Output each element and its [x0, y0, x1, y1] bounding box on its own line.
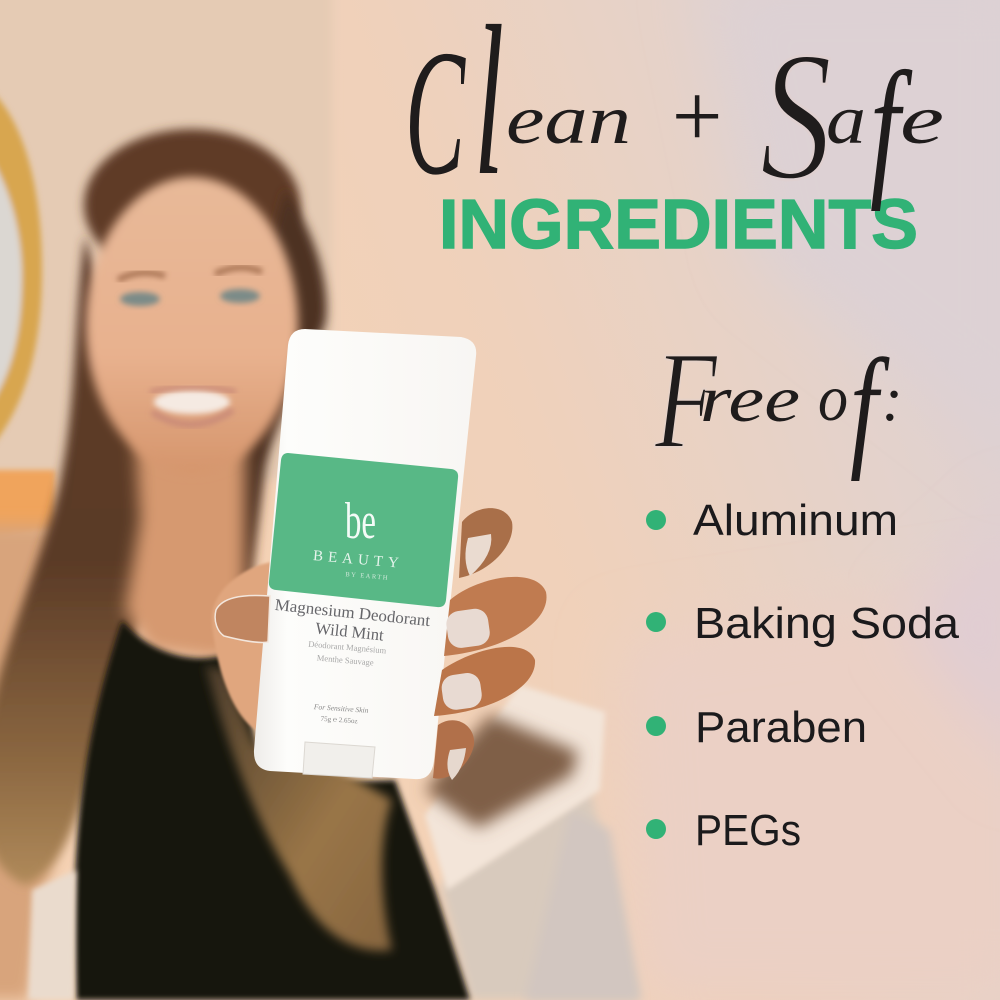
title script: Clean + Safe: f — [870, 40, 912, 212]
item: Aluminum: Aluminum — [693, 496, 898, 545]
fingers — [215, 508, 547, 780]
brand mark: be — [345, 493, 376, 550]
subheading script: Free of: F — [654, 323, 718, 478]
product name: 75g ℮ 2.65oz — [320, 715, 358, 725]
subheading script: Free of: : — [882, 366, 903, 434]
subheading script: Free of: o — [818, 362, 848, 435]
subheading script: Free of: ree — [700, 363, 800, 436]
hair top — [84, 129, 300, 281]
heading: INGREDIENTS: INGREDIENTS — [439, 185, 918, 263]
title script: Clean + Safe: S — [760, 14, 832, 219]
folded towel — [425, 715, 578, 828]
neck and chest — [125, 430, 245, 660]
black top — [74, 620, 470, 1000]
product name: Wild Mint — [314, 618, 385, 645]
hair, behind neck right — [205, 190, 327, 600]
middle finger — [444, 577, 547, 656]
eyebrows — [118, 273, 165, 280]
title script: Clean + Safe: ean — [506, 82, 631, 159]
product name — [274, 595, 432, 725]
smile — [154, 390, 230, 414]
hair, left side — [0, 235, 165, 885]
eyes — [120, 292, 160, 306]
title script: Clean + Safe: C — [405, 13, 466, 212]
product name: For Sensitive Skin — [313, 702, 369, 715]
bare arm and skin, left — [0, 525, 70, 1000]
brand name: BEAUTY — [312, 548, 404, 572]
deodorant stick — [254, 329, 476, 779]
item: Baking Soda: Baking Soda — [694, 599, 960, 648]
base notch — [303, 742, 375, 778]
cabinet side shadow — [525, 810, 640, 1000]
list: free-of ingredients — [646, 496, 960, 855]
item: PEGs — [646, 806, 801, 855]
item: Paraben: Paraben — [695, 703, 867, 752]
face — [86, 177, 298, 473]
title script: Clean + Safe: e — [900, 82, 944, 159]
blurred cabinet — [425, 685, 640, 1000]
little finger — [433, 720, 474, 779]
item: PEGs: PEGs — [695, 806, 801, 855]
green label — [269, 453, 458, 607]
hair, right lower — [205, 665, 392, 951]
title script: Clean + Safe: + — [666, 67, 727, 166]
product name: Menthe Sauvage — [316, 653, 374, 667]
thumb nail — [215, 596, 270, 643]
title script: Clean + Safe: a — [826, 82, 866, 159]
blurred mirror frame — [0, 75, 42, 470]
back of hand — [212, 562, 272, 733]
ring finger — [434, 647, 535, 716]
cabinet drawers — [440, 790, 640, 1000]
stick body — [254, 329, 476, 779]
product name: Déodorant Magnésium — [308, 639, 387, 655]
product name: Magnesium Deodorant — [274, 595, 432, 630]
cabinet top — [425, 685, 605, 890]
brand subline: BY EARTH — [345, 571, 389, 582]
subheading script: Free of: f — [850, 332, 890, 482]
index finger — [459, 508, 512, 578]
wall at bottom left — [28, 870, 76, 1000]
orange shoulder patch — [0, 470, 55, 540]
blurred woman — [0, 129, 470, 1000]
